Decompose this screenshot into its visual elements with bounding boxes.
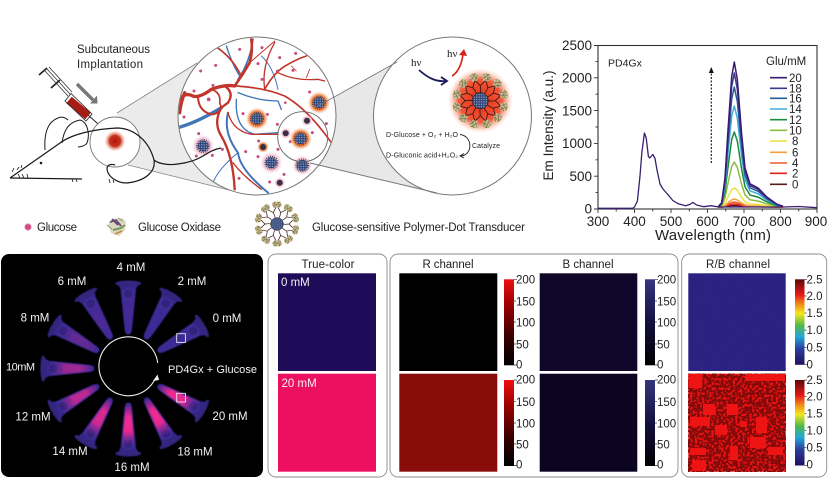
image: ratio 20 mM: [688, 374, 786, 472]
decorative cone edge: [117, 63, 233, 191]
panel: zoom cone to transducer: [310, 62, 437, 193]
legend: glucose concentration: 8: [792, 136, 798, 148]
text: reaction equation: D-Gluconic acid+H₂O₂: [386, 152, 458, 160]
tube labels: 12 mM: [15, 412, 51, 424]
panel: tissue lens with vessels: [178, 37, 336, 195]
colorbar: B bottom: 150: [657, 397, 676, 409]
icon: excitation arrow: [419, 70, 447, 85]
colorbar: ratio bottom: [795, 375, 822, 472]
image: 20 mM: [278, 374, 376, 472]
caption: PD4Gx + Glucose: [168, 364, 257, 376]
legend: glucose concentration: 20: [789, 73, 802, 85]
image: B 0 mM: [540, 273, 637, 371]
colorbar: B top: 50: [657, 340, 670, 352]
colorbar: ratio top: [795, 274, 822, 372]
colorbar: ratio top: 0: [806, 360, 813, 372]
legend: glucose concentration: 12: [789, 115, 802, 127]
title: implantation label: Implantation: [77, 59, 143, 71]
colorbar: ratio top: 2.0: [806, 291, 822, 303]
colorbar: R bottom: 0: [516, 460, 522, 472]
x tick labels: 700: [733, 214, 755, 229]
tube labels: 0 mM: [213, 313, 241, 325]
x tick labels: [587, 214, 827, 229]
colorbar: R bottom: 100: [516, 418, 535, 430]
colorbar: ratio bottom: 1.5: [806, 409, 822, 421]
y tick labels: 1000: [562, 136, 592, 151]
tube labels: 8 mM: [21, 312, 49, 324]
x tick labels: 900: [805, 214, 827, 229]
tube labels: 16 mM: [114, 462, 150, 474]
legend: glucose concentration: 18: [789, 84, 802, 96]
y tick labels: 500: [569, 169, 592, 184]
colorbar: R top: 100: [516, 318, 535, 330]
icon: polymer dot with enzymes: [448, 69, 512, 133]
decorative cone edge 2: [310, 62, 437, 193]
glucose dots: [182, 46, 328, 183]
x axis title: Wavelength (nm): [655, 227, 771, 244]
colorbar: B bottom: 0: [657, 460, 663, 472]
x tick labels: 500: [660, 214, 682, 229]
polymer dots: [192, 92, 330, 188]
colorbar: ratio bottom: 1.0: [806, 426, 822, 438]
tube labels: 20 mM: [212, 411, 248, 423]
x tick labels: 400: [623, 214, 646, 229]
colorbar: B top: 100: [657, 318, 676, 330]
axis ticks: [594, 46, 817, 213]
sampling squares: [177, 334, 185, 402]
series label: PD4Gx: [608, 58, 643, 70]
icon: mouse tail: [154, 148, 221, 165]
icon: emission arrow: [452, 49, 467, 76]
tube labels: 6 mM: [58, 276, 86, 288]
legend: glucose concentration: 2: [792, 168, 798, 180]
panel: R and B channels: B channel: [562, 259, 614, 271]
text: photon labels: hν: [447, 48, 458, 60]
legend: glucose oxidase: Glucose Oxidase: [138, 222, 221, 234]
panel: true-color: [268, 254, 387, 477]
icon: syringe: [39, 67, 106, 131]
colorbar: B bottom: 200: [657, 374, 676, 386]
colorbar: ratio bottom: 2.0: [806, 392, 822, 404]
text: photon labels: hν: [411, 57, 422, 69]
arrow: circular sequence: [99, 337, 159, 396]
red arteries: [180, 39, 331, 189]
panel: true-color: True-color: [302, 259, 355, 271]
blue veins: [178, 39, 281, 193]
panel: true-color: 0 mM: [281, 277, 310, 289]
legend: glucose concentration: 6: [792, 148, 798, 160]
panel: true-color: 20 mM: [282, 378, 317, 390]
colorbar: R bottom: 50: [516, 440, 529, 452]
colorbar: ratio top: 1.0: [806, 325, 822, 337]
legend: glucose oxidase: [107, 218, 221, 236]
axes frame: [598, 46, 817, 209]
y tick labels: 2000: [562, 70, 592, 86]
tube labels: 2 mM: [178, 276, 206, 288]
colorbar: R top: 50: [516, 340, 529, 352]
title: implantation label: [77, 44, 150, 71]
image: 0 mM: [278, 273, 376, 371]
y axis title: Em Intensity (a.u.): [541, 70, 556, 180]
tube labels: 14 mM: [52, 446, 88, 458]
spectrum curves: [598, 62, 817, 208]
colorbar: B top: [645, 274, 676, 372]
y tick labels: 2500: [562, 38, 592, 53]
colorbar: ratio bottom: 0.5: [806, 443, 822, 455]
x tick labels: 800: [769, 214, 792, 229]
panel: R/B ratio: [682, 254, 827, 477]
tube labels: [6, 262, 248, 474]
icon: mouse outline: [10, 117, 154, 183]
image: R 0 mM: [399, 273, 497, 371]
colorbar: ratio top: 1.5: [806, 308, 822, 320]
tube labels: 18 mM: [177, 447, 213, 459]
legend: glucose concentration: 0: [792, 180, 798, 192]
icon: implant site lens: [90, 117, 140, 167]
chart: emission spectrum: [541, 38, 827, 244]
arrow: increasing glucose: [709, 67, 714, 163]
colorbar: ratio top: 2.5: [806, 274, 822, 286]
colorbar: R bottom: 150: [516, 397, 535, 409]
panel: zoom cone from mouse: [117, 63, 233, 191]
legend: glucose concentration: [766, 56, 806, 192]
panel: R/B ratio: R/B channel: [706, 259, 770, 271]
title: implantation label: Subcutaneous: [77, 44, 150, 56]
colorbar: B bottom: [645, 374, 676, 472]
panel: transducer lens: [374, 37, 532, 195]
colorbar: ratio top: 0.5: [806, 342, 822, 354]
colorbar: ratio bottom: 2.5: [806, 375, 822, 387]
y tick labels: [562, 38, 592, 216]
panel: R and B channels: R channel: [422, 259, 474, 271]
text: photon labels: [411, 48, 458, 69]
x tick labels: 600: [696, 214, 719, 229]
colorbar: R bottom: [504, 374, 535, 472]
panel: R and B channels: [390, 254, 678, 477]
tubes arranged by concentration: [40, 280, 211, 456]
image: B 20 mM: [540, 374, 637, 472]
image: ratio 0 mM: [688, 273, 786, 371]
colorbar: B bottom: 50: [657, 440, 670, 452]
y tick labels: 0: [584, 202, 592, 216]
tube labels: 4 mM: [117, 262, 145, 274]
legend: glucose concentration: 10: [789, 126, 802, 138]
text: reaction equation: D-Glucose + O₂ + H₂O: [386, 132, 459, 139]
colorbar: B top: 200: [657, 274, 676, 286]
colorbar: B top: 0: [657, 360, 663, 372]
legend: glucose concentration: 4: [792, 158, 799, 170]
y tick labels: 1500: [562, 104, 592, 118]
legend: glucose: Glucose: [37, 222, 77, 234]
colorbar: R top: [504, 274, 535, 372]
legend: glucose concentration: 16: [789, 94, 802, 106]
legend: glucose concentration: 14: [789, 104, 802, 116]
colorbar: R top: 150: [516, 296, 535, 308]
x tick labels: 300: [587, 214, 609, 229]
colorbar: ratio bottom: 0: [806, 460, 813, 472]
legend: transducer: Glucose-sensitive Polymer-Dot Transducer: [312, 222, 525, 234]
colorbar: B bottom: 100: [657, 418, 676, 430]
legend: transducer: [254, 200, 525, 248]
text: reaction equation: [386, 132, 500, 160]
image: R 20 mM: [399, 374, 497, 472]
legend: glucose concentration: Glu/mM: [766, 56, 806, 68]
panel: tube photo: [1, 254, 263, 477]
text: reaction equation: Catalyze: [472, 143, 500, 150]
tube labels: 10mM: [6, 362, 35, 374]
colorbar: R top: 200: [516, 274, 535, 286]
colorbar: R bottom: 200: [516, 374, 535, 386]
colorbar: R top: 0: [516, 360, 522, 372]
arrow: injection direction: [77, 84, 98, 104]
colorbar: B top: 150: [657, 296, 676, 308]
